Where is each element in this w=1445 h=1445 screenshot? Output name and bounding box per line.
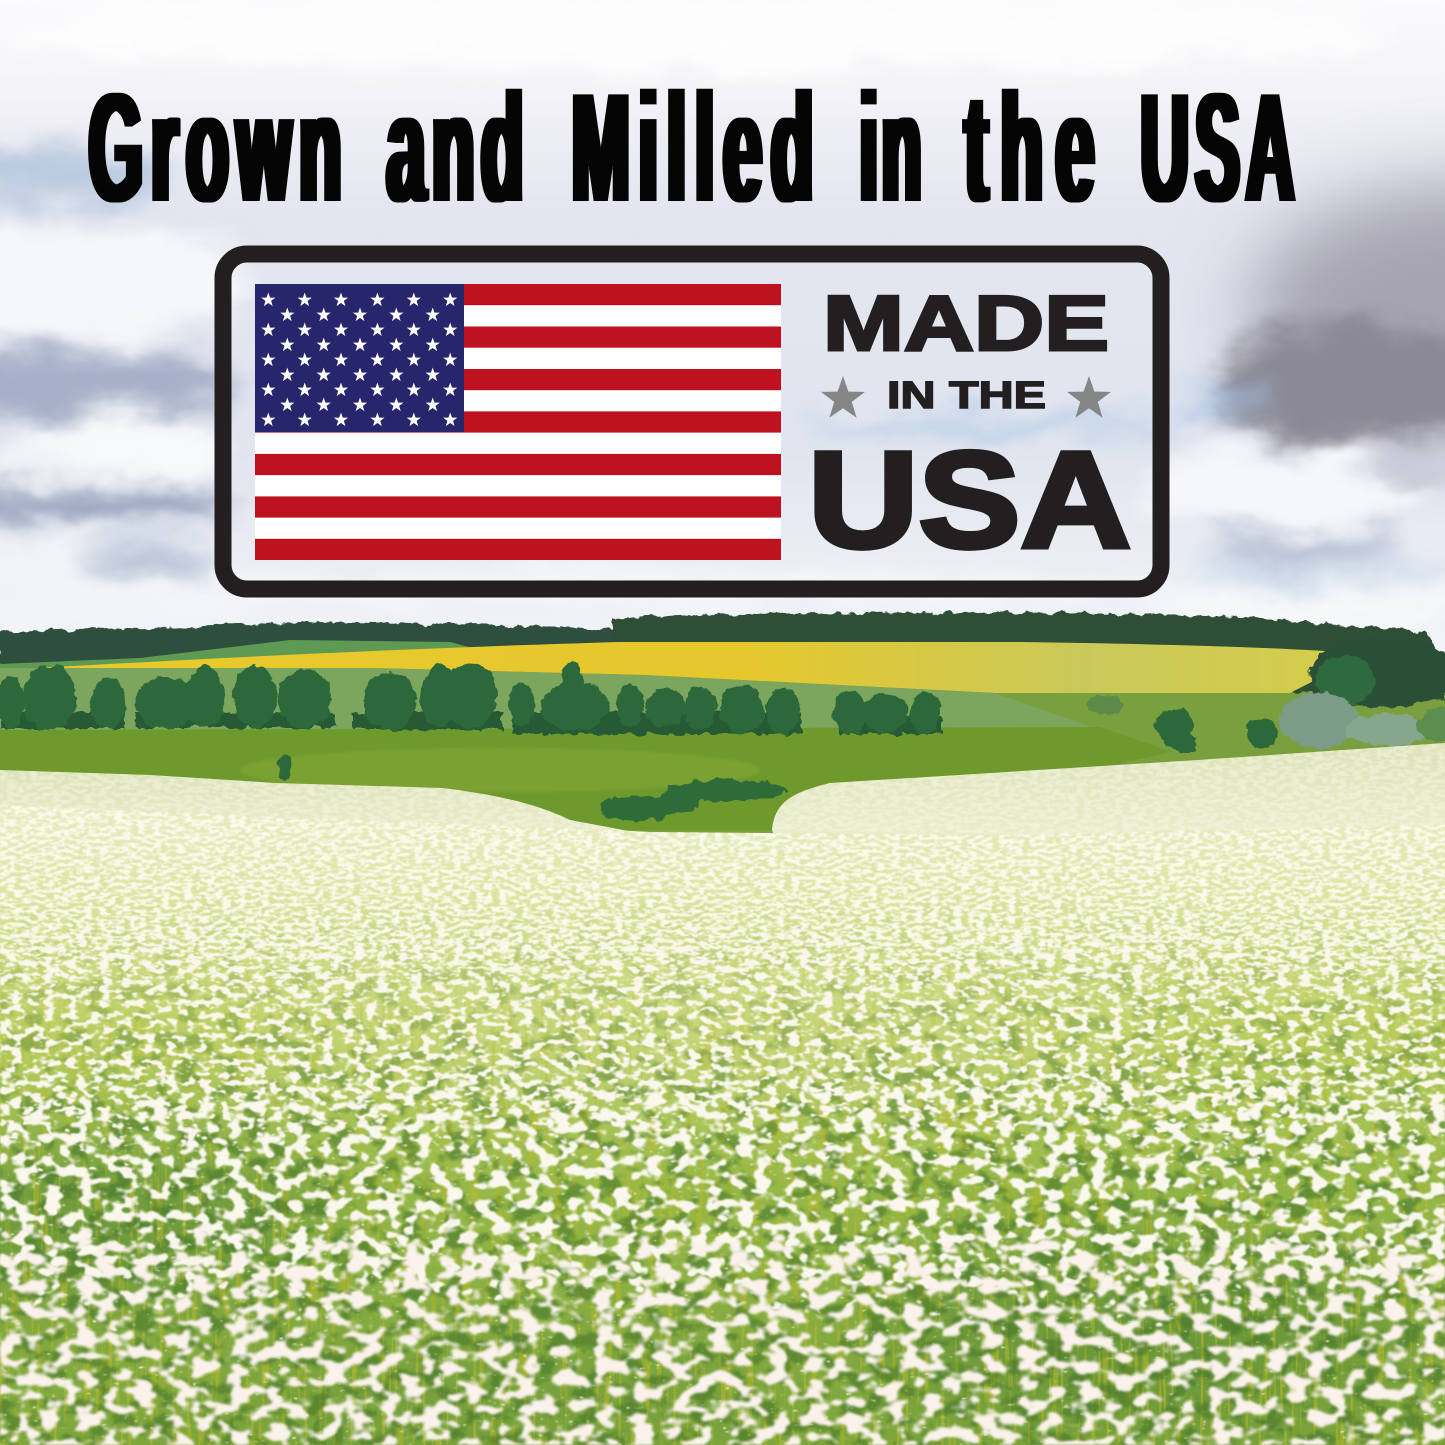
text: IN THE: IN THE [887,375,1046,417]
near blossoms [0,800,1445,1445]
text: USA: USA [808,424,1131,577]
title [89,61,1294,235]
stems [0,925,1445,1445]
sunflower field [0,642,1355,693]
icon: right grey star [1067,376,1111,418]
tree row [0,662,1278,782]
badge: made in the USA [223,254,1161,589]
title: USA [1141,62,1294,235]
badge frame [223,254,1161,589]
title: in [860,61,921,235]
text: MADE: MADE [823,279,1109,367]
mid blossoms [0,800,1445,1445]
right foreground hill [772,743,1445,860]
title: Grown [89,62,342,235]
darker and lighter field patches [0,990,1430,1440]
central bushes [600,779,786,821]
green base layer [0,660,1445,850]
background: cloudy sky [0,0,1445,650]
title: and [387,62,524,235]
far blossoms [0,800,1445,1445]
american flag [255,284,781,560]
icon: left grey star [821,376,865,418]
background: buckwheat flower field [0,800,1445,1445]
green crop field [0,668,1100,745]
title: Milled [572,62,813,235]
title: the [965,62,1094,235]
background: rolling hills, tree lines and sunflower field [0,612,1445,860]
meadow [0,727,1172,830]
back tree line [0,612,1445,700]
right side trees [1280,637,1445,748]
hill speckle texture [0,744,1445,834]
left foreground hill [0,770,650,860]
leaves [0,920,1445,1445]
rear green strip [0,640,480,680]
middle-near blossoms [0,800,1445,1445]
